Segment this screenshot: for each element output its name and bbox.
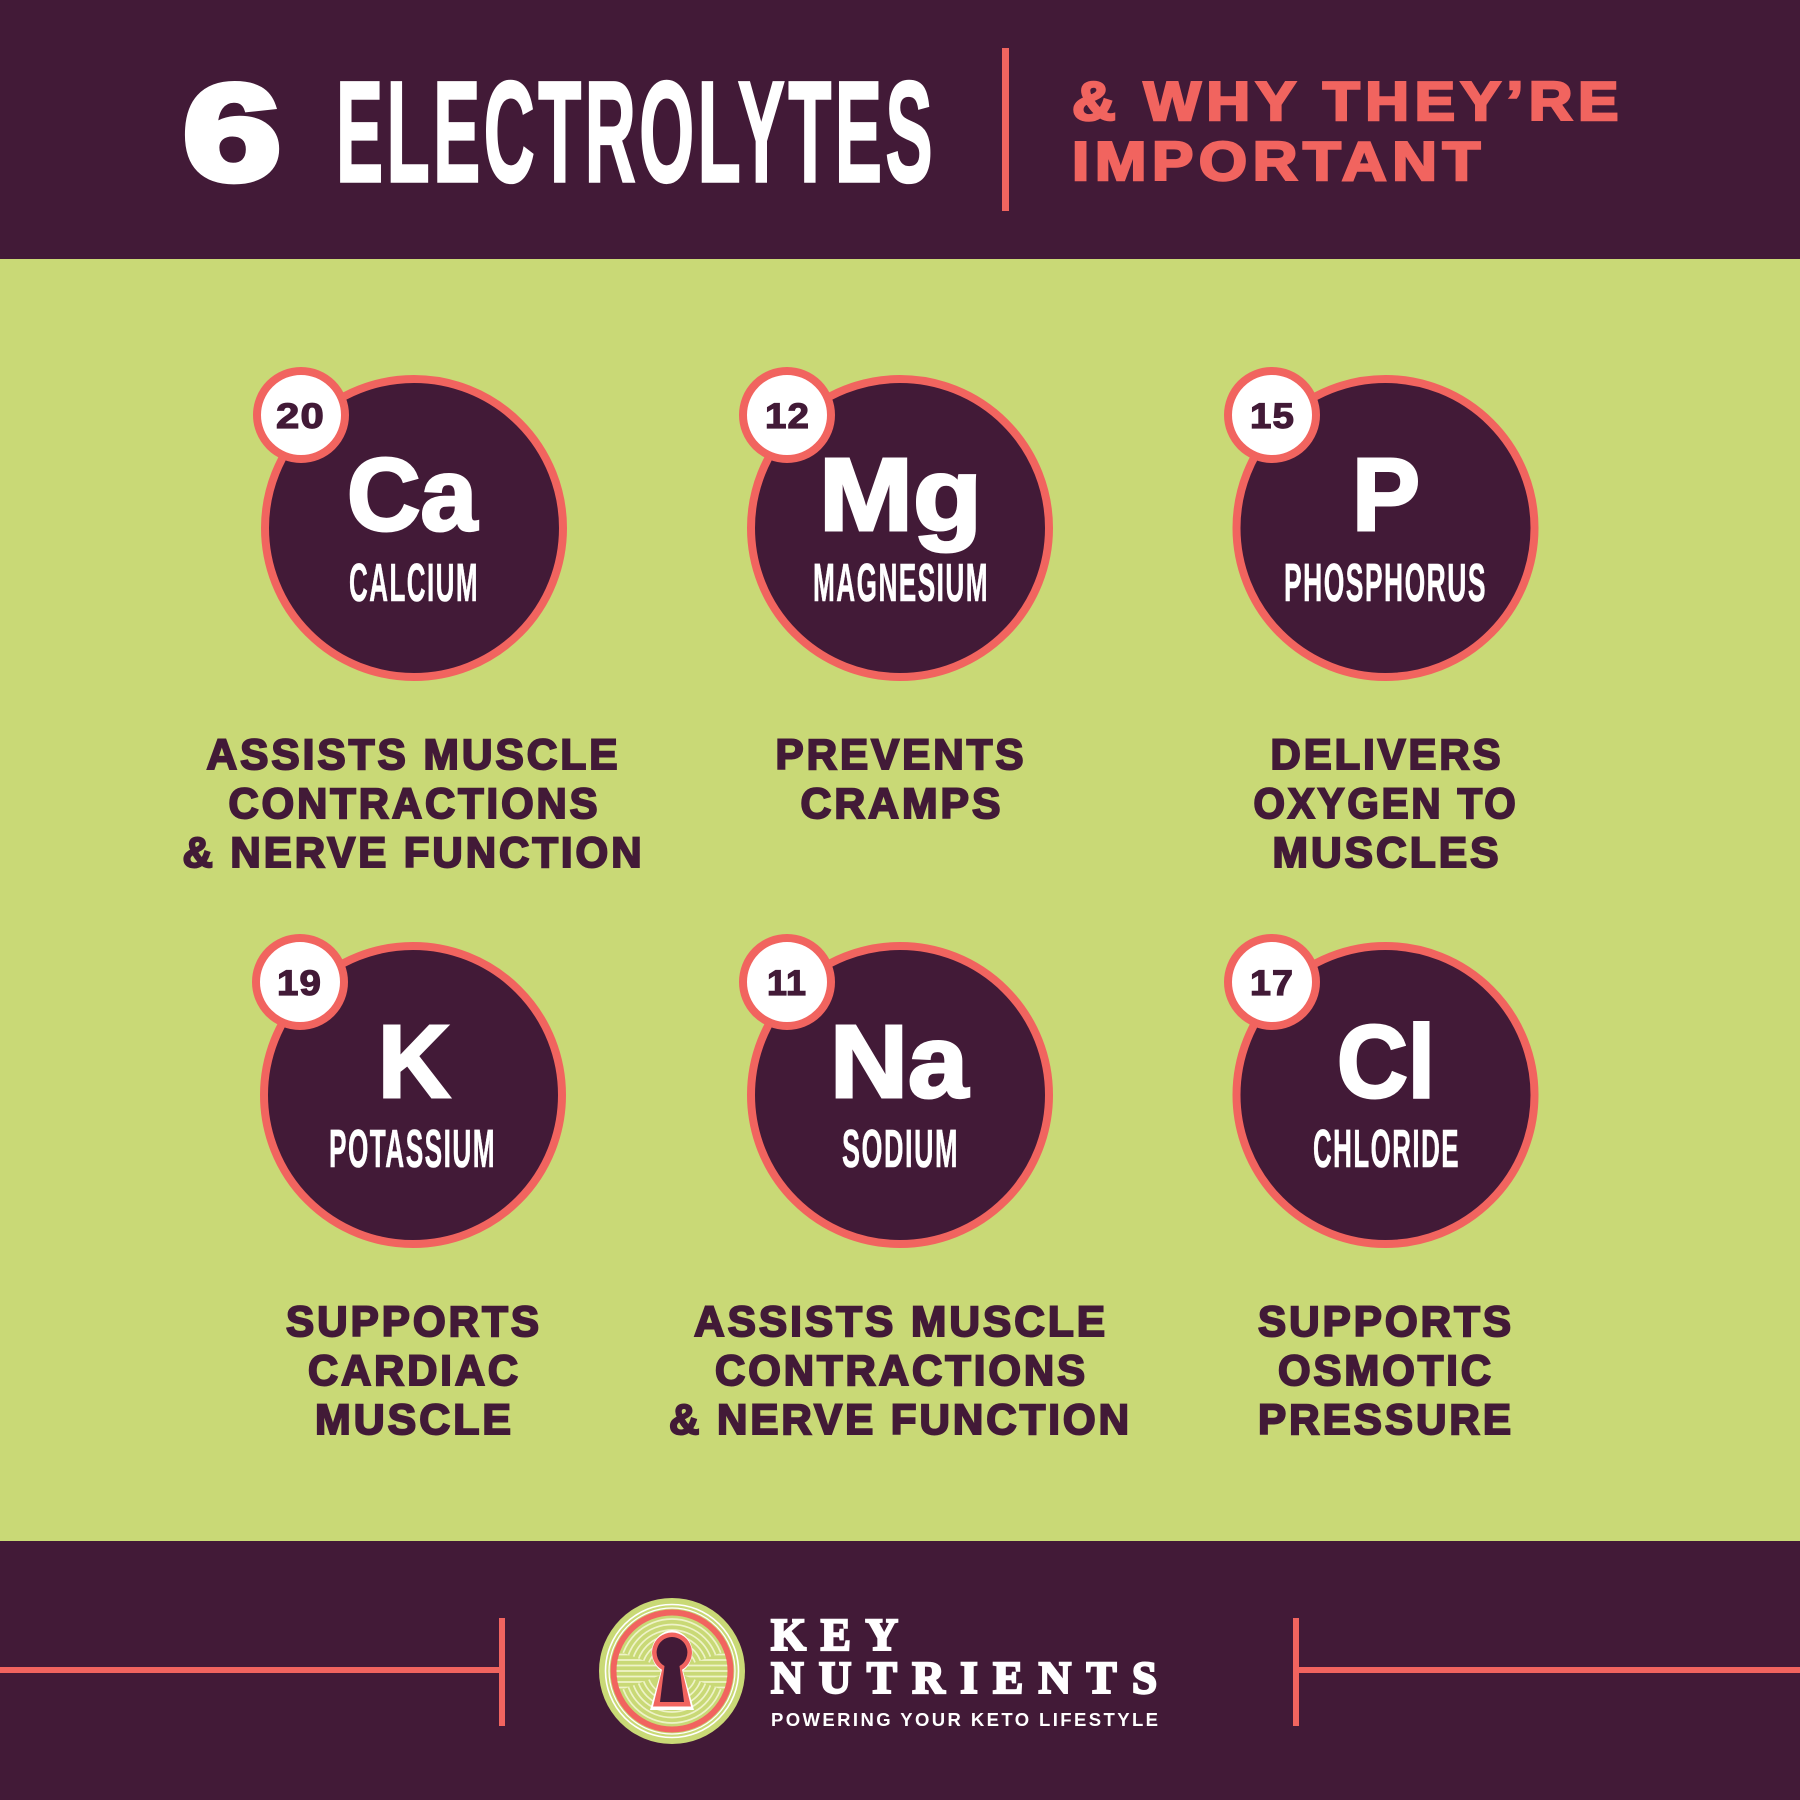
subtitle: & WHY THEY’RE [1072, 70, 1624, 132]
description: magnesium [776, 731, 1026, 828]
atomic number badge: 12: 12 [765, 397, 810, 436]
atomic number badge: 11 [743, 938, 831, 1026]
atomic number badge: 20: 20 [276, 397, 325, 436]
atomic number badge: 19: 19 [277, 964, 322, 1003]
atomic number badge: 17 [1228, 938, 1316, 1026]
description: calcium [182, 731, 644, 877]
description: chloride: OSMOTIC [1278, 1347, 1494, 1395]
atomic number badge: 15: 15 [1250, 397, 1295, 436]
description: chloride [1258, 1298, 1514, 1444]
description: phosphorus: MUSCLES [1272, 829, 1502, 877]
title number 6: 6 [183, 56, 281, 208]
name: sodium: SODIUM [842, 1119, 959, 1179]
subtitle [1072, 70, 1624, 192]
footer left rule [0, 1618, 502, 1726]
atomic number badge: 11: 11 [767, 964, 807, 1003]
symbol: Mg: Mg [819, 437, 982, 552]
footer right rule [1296, 1618, 1800, 1726]
brand name [771, 1610, 1157, 1703]
brand tagline: POWERING YOUR KETO LIFESTYLE [771, 1709, 1158, 1730]
description: sodium [669, 1298, 1132, 1444]
atomic number badge: 20 [257, 371, 345, 459]
element card: phosphorus: PHOSPHORUS [1284, 553, 1487, 613]
description: phosphorus: OXYGEN TO [1254, 780, 1518, 828]
description: phosphorus [1254, 731, 1518, 877]
symbol: K: K [378, 1004, 450, 1119]
element card: calcium [182, 371, 644, 877]
description: potassium: SUPPORTS [286, 1298, 542, 1346]
description: chloride: SUPPORTS [1258, 1298, 1514, 1346]
element card: potassium [256, 938, 562, 1444]
element card: phosphorus [1228, 371, 1534, 877]
element card: potassium: POTASSIUM [329, 1119, 496, 1179]
description: calcium: CONTRACTIONS [228, 780, 600, 828]
description: magnesium: CRAMPS [800, 780, 1004, 828]
description: potassium: MUSCLE [315, 1396, 514, 1444]
description: calcium: ASSISTS MUSCLE [206, 731, 620, 779]
atomic number badge: 12 [743, 371, 831, 459]
description: chloride: PRESSURE [1258, 1396, 1514, 1444]
symbol: Na: Na [830, 1004, 969, 1119]
description: potassium [286, 1298, 542, 1444]
description: magnesium: PREVENTS [776, 731, 1026, 779]
atomic number badge: 15 [1228, 371, 1316, 459]
description: sodium: & NERVE FUNCTION [669, 1396, 1132, 1444]
symbol: Ca: Ca [347, 437, 478, 552]
symbol: Cl: Cl [1337, 1004, 1435, 1119]
brand name: KEY [771, 1610, 898, 1660]
brand name: NUTRIENTS [771, 1653, 1157, 1703]
header banner [0, 0, 1800, 259]
subtitle: IMPORTANT [1072, 130, 1486, 192]
element card: calcium: CALCIUM [349, 553, 479, 613]
element card: sodium [669, 938, 1132, 1444]
element card: chloride [1228, 938, 1534, 1444]
icon: keyhole logo [599, 1598, 745, 1744]
symbol: P: P [1352, 437, 1420, 552]
header banner: ELECTROLYTES [336, 52, 936, 212]
element card: chloride: CHLORIDE [1313, 1119, 1460, 1179]
description: sodium: ASSISTS MUSCLE [694, 1298, 1108, 1346]
element card: magnesium [743, 371, 1049, 828]
description: sodium: CONTRACTIONS [715, 1347, 1088, 1395]
atomic number badge: 19 [256, 938, 344, 1026]
description: phosphorus: DELIVERS [1270, 731, 1504, 779]
atomic number badge: 17: 17 [1250, 964, 1294, 1003]
description: calcium: & NERVE FUNCTION [182, 829, 644, 877]
element card: magnesium: MAGNESIUM [813, 553, 989, 613]
footer banner [0, 1541, 1800, 1800]
header divider [1002, 48, 1009, 211]
description: potassium: CARDIAC [308, 1347, 521, 1395]
